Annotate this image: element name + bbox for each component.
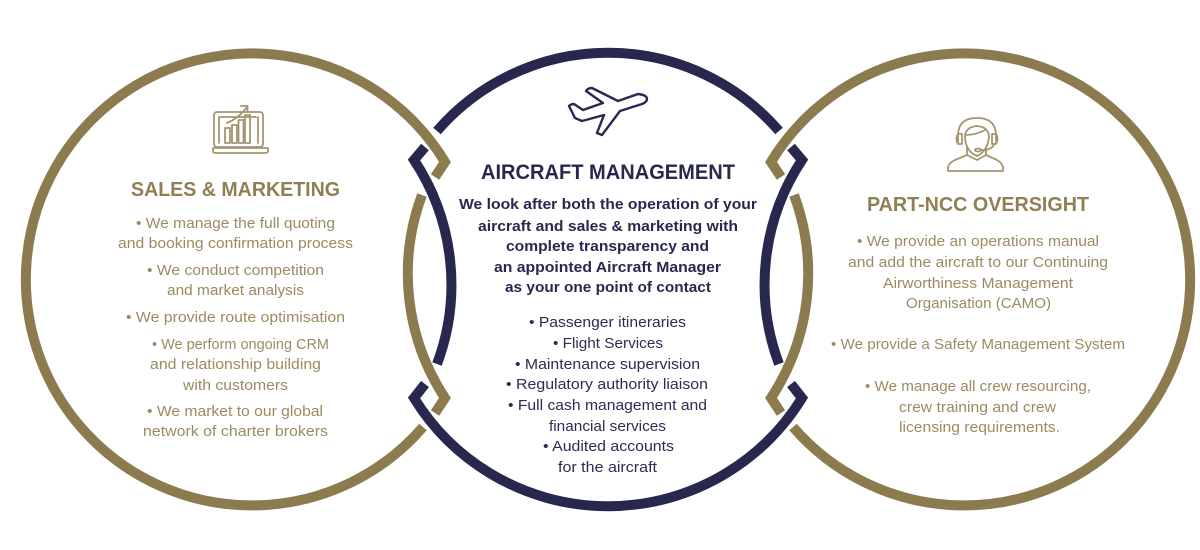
text block: sales list [118, 215, 353, 440]
ring: left gold circle [26, 53, 445, 505]
text block: sales list: • We market to our global [147, 403, 323, 420]
icon: laptop with rising chart [213, 106, 268, 153]
text block: aircraft management summary: complete transparency and [506, 238, 709, 255]
text block: part-ncc list [831, 233, 1125, 436]
heading: part-ncc oversight: PART-NCC OVERSIGHT [867, 194, 1089, 216]
icon: person with headset [948, 118, 1003, 171]
text block: aircraft management list: for the aircraft [558, 459, 658, 476]
text block: part-ncc list: and add the aircraft to our Continuing [848, 254, 1108, 271]
panel: aircraft management [459, 88, 757, 476]
text block: sales list: • We conduct competition [147, 262, 324, 279]
ring: centre navy bottom arc [414, 384, 802, 506]
text block: aircraft management list: • Maintenance supervision [515, 356, 700, 373]
text block: part-ncc list: crew training and crew [899, 399, 1056, 416]
text block: sales list: with customers [182, 377, 288, 394]
text block: part-ncc list: Organisation (CAMO) [906, 295, 1051, 312]
panel: sales and marketing [118, 106, 353, 440]
text block: sales list: • We provide route optimisation [126, 309, 345, 326]
text block: sales list: network of charter brokers [143, 423, 328, 440]
text block: aircraft management list [506, 314, 708, 476]
text block: aircraft management list: • Audited accounts [543, 438, 674, 455]
text block: aircraft management summary: aircraft and sales & marketing with [478, 218, 738, 235]
text block: sales list: and relationship building [150, 356, 321, 373]
text block: aircraft management list: financial services [549, 418, 666, 435]
heading: aircraft management: AIRCRAFT MANAGEMENT [481, 161, 735, 184]
text block: aircraft management list: • Passenger itineraries [529, 314, 686, 331]
text block: part-ncc list: • We provide a Safety Management System [831, 336, 1125, 353]
text block: aircraft management summary: We look after both the operation of your [459, 196, 757, 213]
text block: aircraft management summary: as your one point of contact [505, 279, 711, 296]
text block: aircraft management list: • Regulatory authority liaison [506, 376, 708, 393]
ring: right gold inner arc [771, 195, 808, 413]
text block: aircraft management list: • Flight Services [553, 335, 663, 352]
ring: centre navy top arc [437, 53, 779, 131]
heading: sales and marketing: SALES & MARKETING [131, 179, 340, 201]
panel: part-ncc oversight [831, 118, 1125, 436]
interlocking rings [26, 53, 1190, 506]
text block: part-ncc list: Airworthiness Management [883, 275, 1074, 292]
text block: sales list: • We manage the full quoting [136, 215, 335, 232]
ring: left gold inner arc [408, 195, 445, 413]
text block: aircraft management list: • Full cash management and [508, 397, 707, 414]
text block: aircraft management summary: an appointed Aircraft Manager [494, 259, 721, 276]
ring: left navy inner arc [414, 147, 451, 364]
text block: part-ncc list: • We manage all crew resourcing, [865, 378, 1091, 395]
text block: sales list: and booking confirmation process [118, 235, 353, 252]
icon: airplane [569, 88, 647, 135]
text block: aircraft management summary [459, 196, 757, 296]
text block: sales list: • We perform ongoing CRM [152, 336, 329, 353]
text block: part-ncc list: • We provide an operations manual [857, 233, 1099, 250]
text block: part-ncc list: licensing requirements. [899, 419, 1060, 436]
ring: right gold circle [771, 53, 1190, 505]
text block: sales list: and market analysis [167, 282, 304, 299]
ring: right navy inner arc [765, 147, 802, 364]
